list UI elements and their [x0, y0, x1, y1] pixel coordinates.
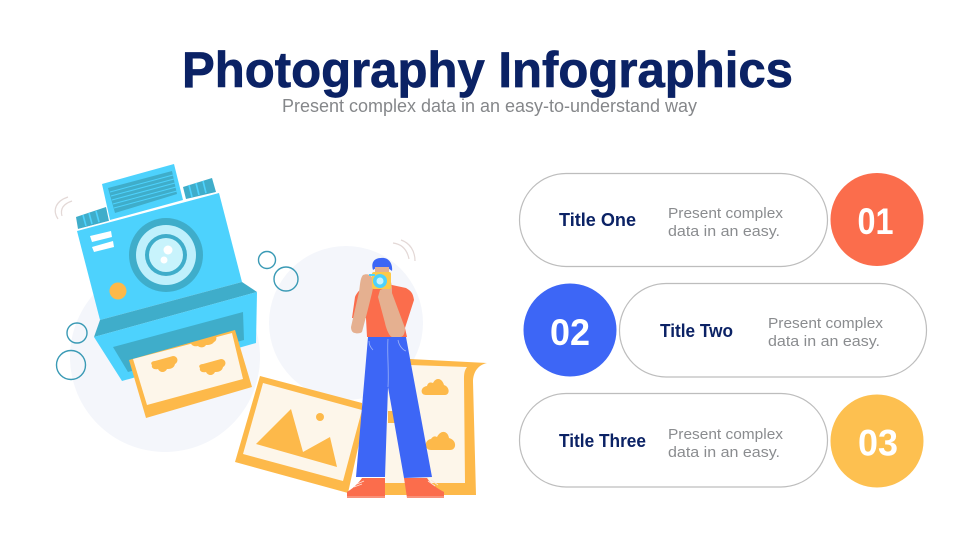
- camera lower section: [94, 282, 257, 337]
- camera lens: [129, 218, 203, 292]
- row title: Title One: [559, 210, 636, 230]
- pill: [520, 394, 828, 487]
- camera label bars: [90, 231, 112, 242]
- description: [668, 205, 784, 240]
- row 1: title one: [520, 173, 924, 266]
- head and hair: [372, 258, 392, 271]
- description: Present complex: [668, 426, 784, 443]
- pill: [620, 284, 926, 377]
- number badge: 03: [858, 422, 898, 464]
- photo with landscape: [235, 376, 362, 493]
- trousers: [356, 337, 432, 478]
- description: [668, 426, 784, 461]
- row 2: title two: [524, 284, 926, 377]
- illustration: photographer and camera: [55, 164, 487, 498]
- small camera: [369, 272, 391, 289]
- description: data in an easy.: [668, 444, 780, 461]
- decorative bubbles: [56, 252, 298, 380]
- camera flash grid: [102, 164, 183, 220]
- shoes: [347, 478, 385, 498]
- pill: [520, 174, 828, 266]
- photographer: [347, 258, 444, 498]
- number badge: [524, 284, 616, 376]
- row title: Title Two: [660, 321, 733, 341]
- description: Present complex: [768, 315, 884, 332]
- number badge: [830, 394, 924, 488]
- camera body: [77, 193, 242, 320]
- background circles: [70, 246, 423, 452]
- description: data in an easy.: [768, 333, 880, 350]
- number badge: [830, 173, 924, 266]
- subtitle: Present complex data in an easy-to-understand way: [282, 96, 697, 116]
- printed photo from camera: [129, 330, 252, 418]
- photo with clouds, upright: [385, 359, 487, 495]
- title: Photography Infographics: [182, 42, 793, 98]
- motion arcs: [55, 197, 415, 261]
- camera side vents: [76, 207, 109, 229]
- number badge: 01: [858, 201, 894, 242]
- description: Present complex: [668, 205, 784, 222]
- shirt: [352, 285, 414, 337]
- arms: [351, 274, 374, 333]
- instant camera: [76, 164, 257, 381]
- description: data in an easy.: [668, 223, 780, 240]
- description: [768, 315, 884, 350]
- row title: Title Three: [559, 431, 646, 451]
- number badge: 02: [550, 312, 590, 353]
- camera button: [110, 282, 126, 300]
- row 3: title three: [520, 394, 924, 488]
